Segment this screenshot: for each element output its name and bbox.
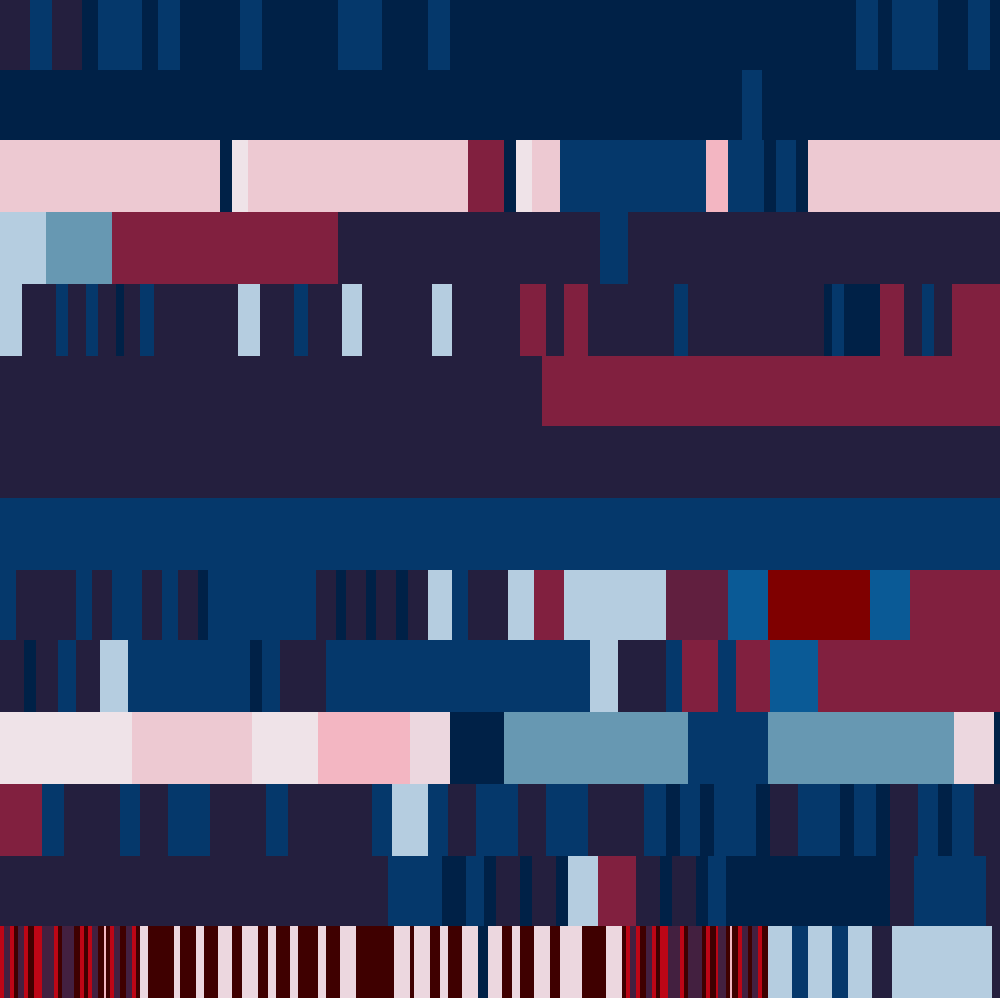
heatmap row 9 <box>0 570 1000 640</box>
heatmap row 12 <box>0 784 1000 856</box>
heatmap row 11 <box>0 712 1000 784</box>
heatmap row 3 <box>0 140 1000 212</box>
heatmap row 6 <box>0 356 1000 426</box>
heatmap row 2 <box>0 70 1000 140</box>
heatmap row 13 <box>0 856 1000 926</box>
heatmap row 8 <box>0 498 1000 570</box>
heatmap row 7 <box>0 426 1000 498</box>
heatmap row 4 <box>0 212 1000 284</box>
heatmap row 1 <box>0 0 1000 70</box>
heatmap row 5 <box>0 284 1000 356</box>
heatmap row 10 <box>0 640 1000 712</box>
heatmap row 14 <box>0 926 1000 998</box>
